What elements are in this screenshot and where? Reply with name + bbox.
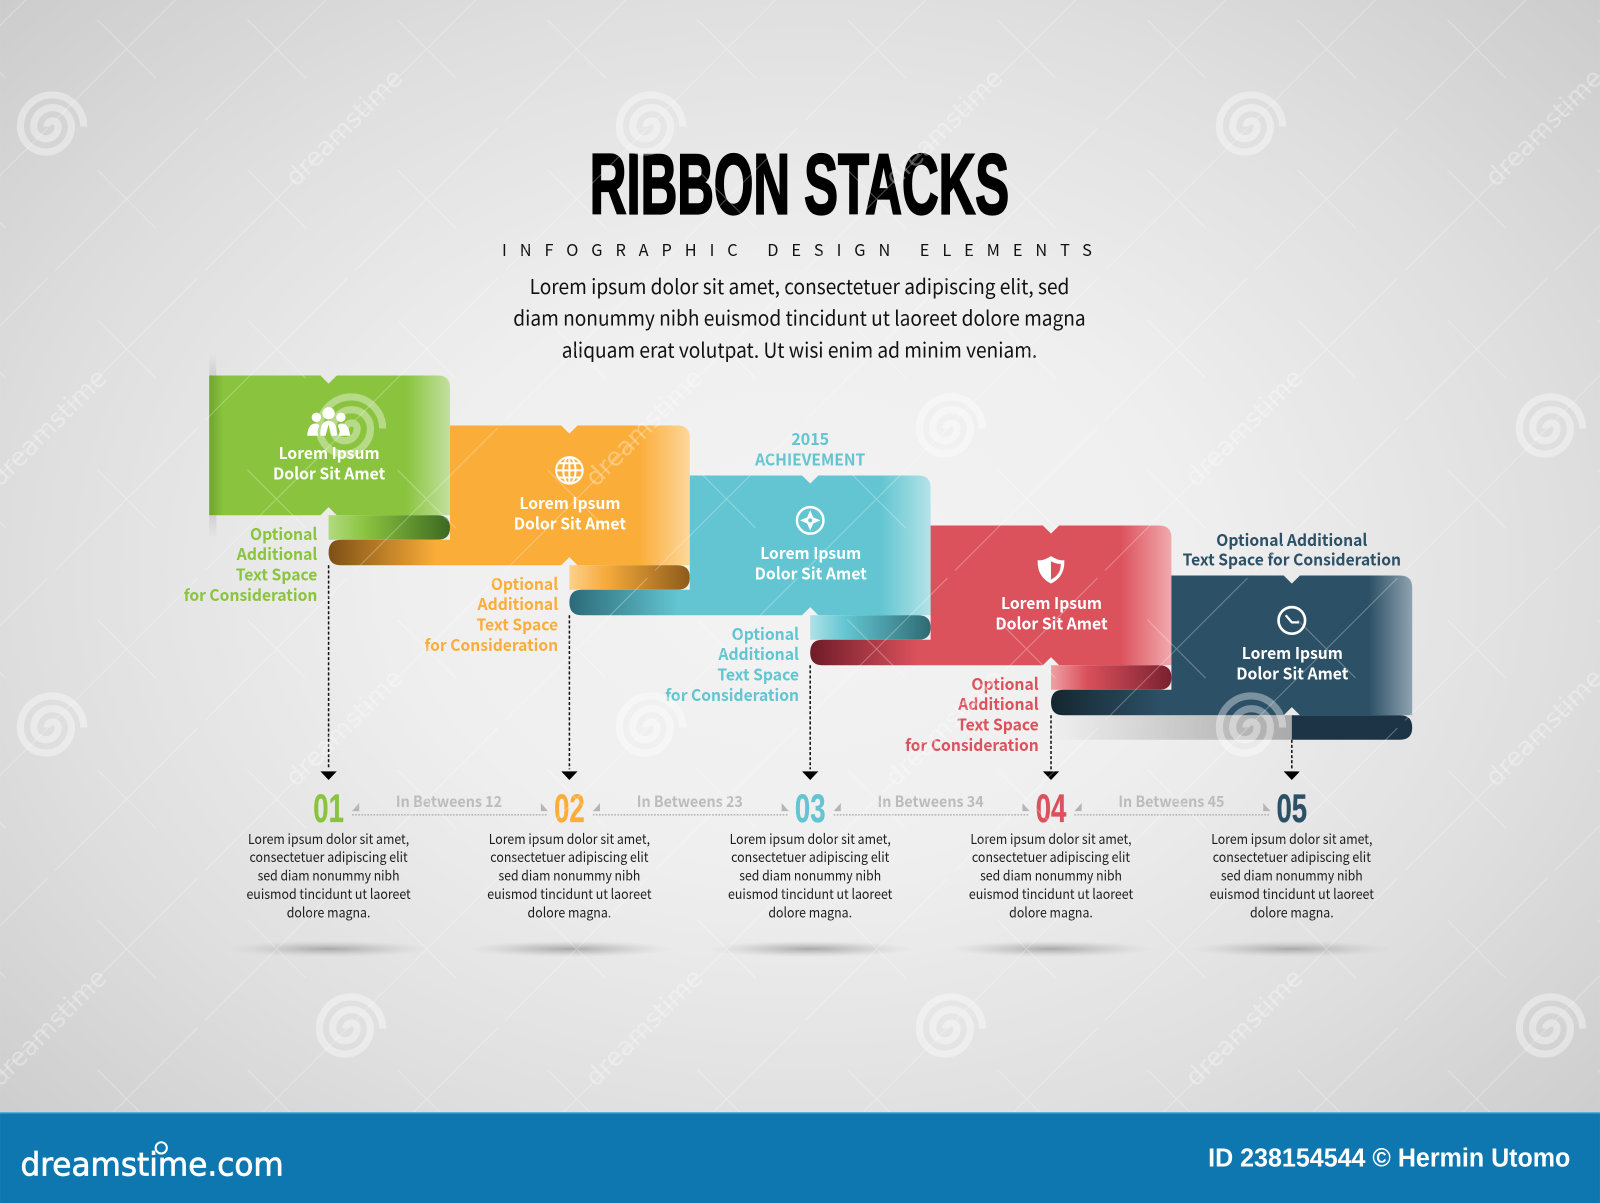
side text: red	[905, 671, 1039, 756]
side text: orange: for Consideration	[425, 632, 558, 656]
icon: compass	[797, 507, 823, 534]
intro paragraph: diam nonummy nibh euismod tincidunt ut laoreet dolore magna	[513, 301, 1086, 331]
step 1 description: dolore magna.	[287, 901, 370, 921]
step 2 description: dolore magna.	[528, 901, 611, 921]
in-between connectors: In Betweens 45	[1118, 790, 1224, 812]
intro paragraph: Lorem ipsum dolor sit amet, consectetuer adipiscing elit, sed	[530, 270, 1069, 300]
in-between connectors: In Betweens 12	[396, 790, 502, 812]
top text: 2015 achievement	[754, 426, 865, 470]
step 5 description	[1210, 828, 1374, 921]
step numbers: 01	[313, 787, 344, 831]
side text: red: Additional	[957, 691, 1039, 715]
side text: orange	[425, 571, 558, 656]
label: Lorem Ipsum	[760, 540, 861, 564]
watermark spirals	[20, 95, 1583, 1054]
watermark text: dreamstime	[280, 663, 409, 793]
icon: people	[307, 407, 350, 436]
step numbers: 03	[795, 787, 826, 831]
step 2 description: euismod tincidunt ut laoreet	[487, 883, 652, 903]
step 2 description: sed diam nonummy nibh	[498, 865, 640, 885]
watermark text: dreamstime	[1180, 363, 1309, 493]
step 3 description	[728, 828, 892, 921]
subtitle: INFOGRAPHIC DESIGN ELEMENTS	[502, 237, 1092, 261]
ribbon 1: green	[209, 354, 450, 540]
in-between connectors: In Betweens 23	[637, 790, 743, 812]
side text: green: Text Space	[236, 562, 317, 586]
label	[755, 540, 867, 585]
step 1 description: sed diam nonummy nibh	[258, 865, 400, 885]
label: Dolor Sit Amet	[1236, 661, 1349, 685]
top text: navy optional: Optional Additional	[1216, 527, 1367, 551]
label: Lorem Ipsum	[1001, 590, 1102, 614]
ribbon 3: teal	[569, 475, 931, 640]
side text: teal: Text Space	[717, 662, 799, 686]
step numbers	[313, 787, 1307, 831]
side text: teal: for Consideration	[665, 682, 799, 706]
step 4 description: Lorem ipsum dolor sit amet,	[970, 828, 1132, 848]
step 1 description: euismod tincidunt ut laoreet	[246, 883, 411, 903]
step 4 description	[969, 828, 1133, 921]
side text: teal: Additional	[717, 641, 799, 665]
label: Dolor Sit Amet	[995, 611, 1108, 635]
ribbon 5: navy	[1051, 575, 1412, 740]
side text: orange: Text Space	[477, 612, 558, 636]
watermark text: dreamstime	[880, 63, 1009, 193]
step 2 description: Lorem ipsum dolor sit amet,	[489, 828, 650, 848]
step 3 description: consectetuer adipiscing elit	[731, 846, 889, 866]
watermark text: dreamstime	[580, 963, 709, 1093]
label	[514, 490, 626, 535]
side text: red: Text Space	[957, 712, 1039, 736]
icon: globe	[556, 457, 583, 484]
floor shadows	[227, 941, 1394, 957]
footer credit: ID 238154544 © Hermin Utomo	[1208, 1144, 1570, 1172]
step 5 description: consectetuer adipiscing elit	[1213, 846, 1371, 866]
step 3 description: Lorem ipsum dolor sit amet,	[730, 828, 891, 848]
step 5 description: Lorem ipsum dolor sit amet,	[1211, 828, 1373, 848]
step numbers: 05	[1277, 787, 1307, 831]
watermark text: dreamstime	[280, 63, 409, 193]
label: Lorem Ipsum	[1242, 640, 1343, 664]
title: RIBBON STACKS	[590, 136, 1009, 232]
label: Lorem Ipsum	[519, 490, 620, 514]
step 3 description: dolore magna.	[768, 901, 852, 921]
side text: teal: Optional	[732, 621, 799, 645]
top text: 2015 achievement: ACHIEVEMENT	[754, 446, 865, 470]
label	[1236, 640, 1349, 685]
step 4 description: sed diam nonummy nibh	[980, 865, 1122, 885]
side text: green	[184, 521, 317, 606]
step numbers: 04	[1036, 787, 1066, 831]
icon: clock	[1279, 607, 1305, 634]
step 1 description	[246, 828, 411, 921]
ribbon 4: red	[810, 525, 1171, 690]
label: Dolor Sit Amet	[514, 511, 626, 535]
label	[995, 590, 1108, 635]
intro paragraph: aliquam erat volutpat. Ut wisi enim ad minim veniam.	[562, 334, 1037, 364]
watermark text: dreamstime	[580, 363, 709, 493]
icon: shield	[1038, 556, 1064, 584]
top text: navy optional: Text Space for Consideration	[1183, 546, 1401, 570]
side text: orange: Additional	[477, 591, 558, 615]
watermark text: dreamstime	[1180, 963, 1309, 1093]
side text: red: for Consideration	[905, 732, 1039, 756]
step 5 description: dolore magna.	[1250, 901, 1334, 921]
in-between connectors: In Betweens 34	[878, 790, 984, 812]
step 2 description: consectetuer adipiscing elit	[490, 846, 648, 866]
footer banner	[0, 1112, 1600, 1203]
step 4 description: consectetuer adipiscing elit	[972, 846, 1130, 866]
step 5 description: euismod tincidunt ut laoreet	[1210, 883, 1374, 903]
footer logo: dreamstime.com	[20, 1147, 284, 1183]
label	[273, 440, 385, 485]
step 4 description: dolore magna.	[1009, 901, 1093, 921]
step 5 description: sed diam nonummy nibh	[1221, 865, 1363, 885]
side text: orange: Optional	[491, 571, 558, 595]
step 4 description: euismod tincidunt ut laoreet	[969, 883, 1133, 903]
side text: green: Additional	[236, 541, 317, 565]
side text: teal	[665, 621, 799, 706]
step 3 description: sed diam nonummy nibh	[739, 865, 881, 885]
intro paragraph	[513, 270, 1086, 364]
side text: green: for Consideration	[184, 582, 317, 606]
step 2 description	[487, 828, 652, 921]
side text: green: Optional	[250, 521, 317, 545]
side text: red: Optional	[971, 671, 1039, 695]
watermark text: dreamstime	[880, 663, 1009, 793]
label: Lorem Ipsum	[279, 440, 380, 464]
top text: 2015 achievement: 2015	[791, 426, 829, 450]
step 3 description: euismod tincidunt ut laoreet	[728, 883, 892, 903]
label: Dolor Sit Amet	[755, 561, 867, 585]
in-between connectors	[352, 790, 1270, 815]
label: Dolor Sit Amet	[273, 461, 385, 485]
ribbon 2: orange	[329, 425, 690, 590]
step 1 description: Lorem ipsum dolor sit amet,	[248, 828, 409, 848]
top text: navy optional	[1183, 527, 1401, 570]
step numbers: 02	[554, 787, 585, 831]
dotted arrows	[320, 565, 1300, 780]
step 1 description: consectetuer adipiscing elit	[250, 846, 408, 866]
